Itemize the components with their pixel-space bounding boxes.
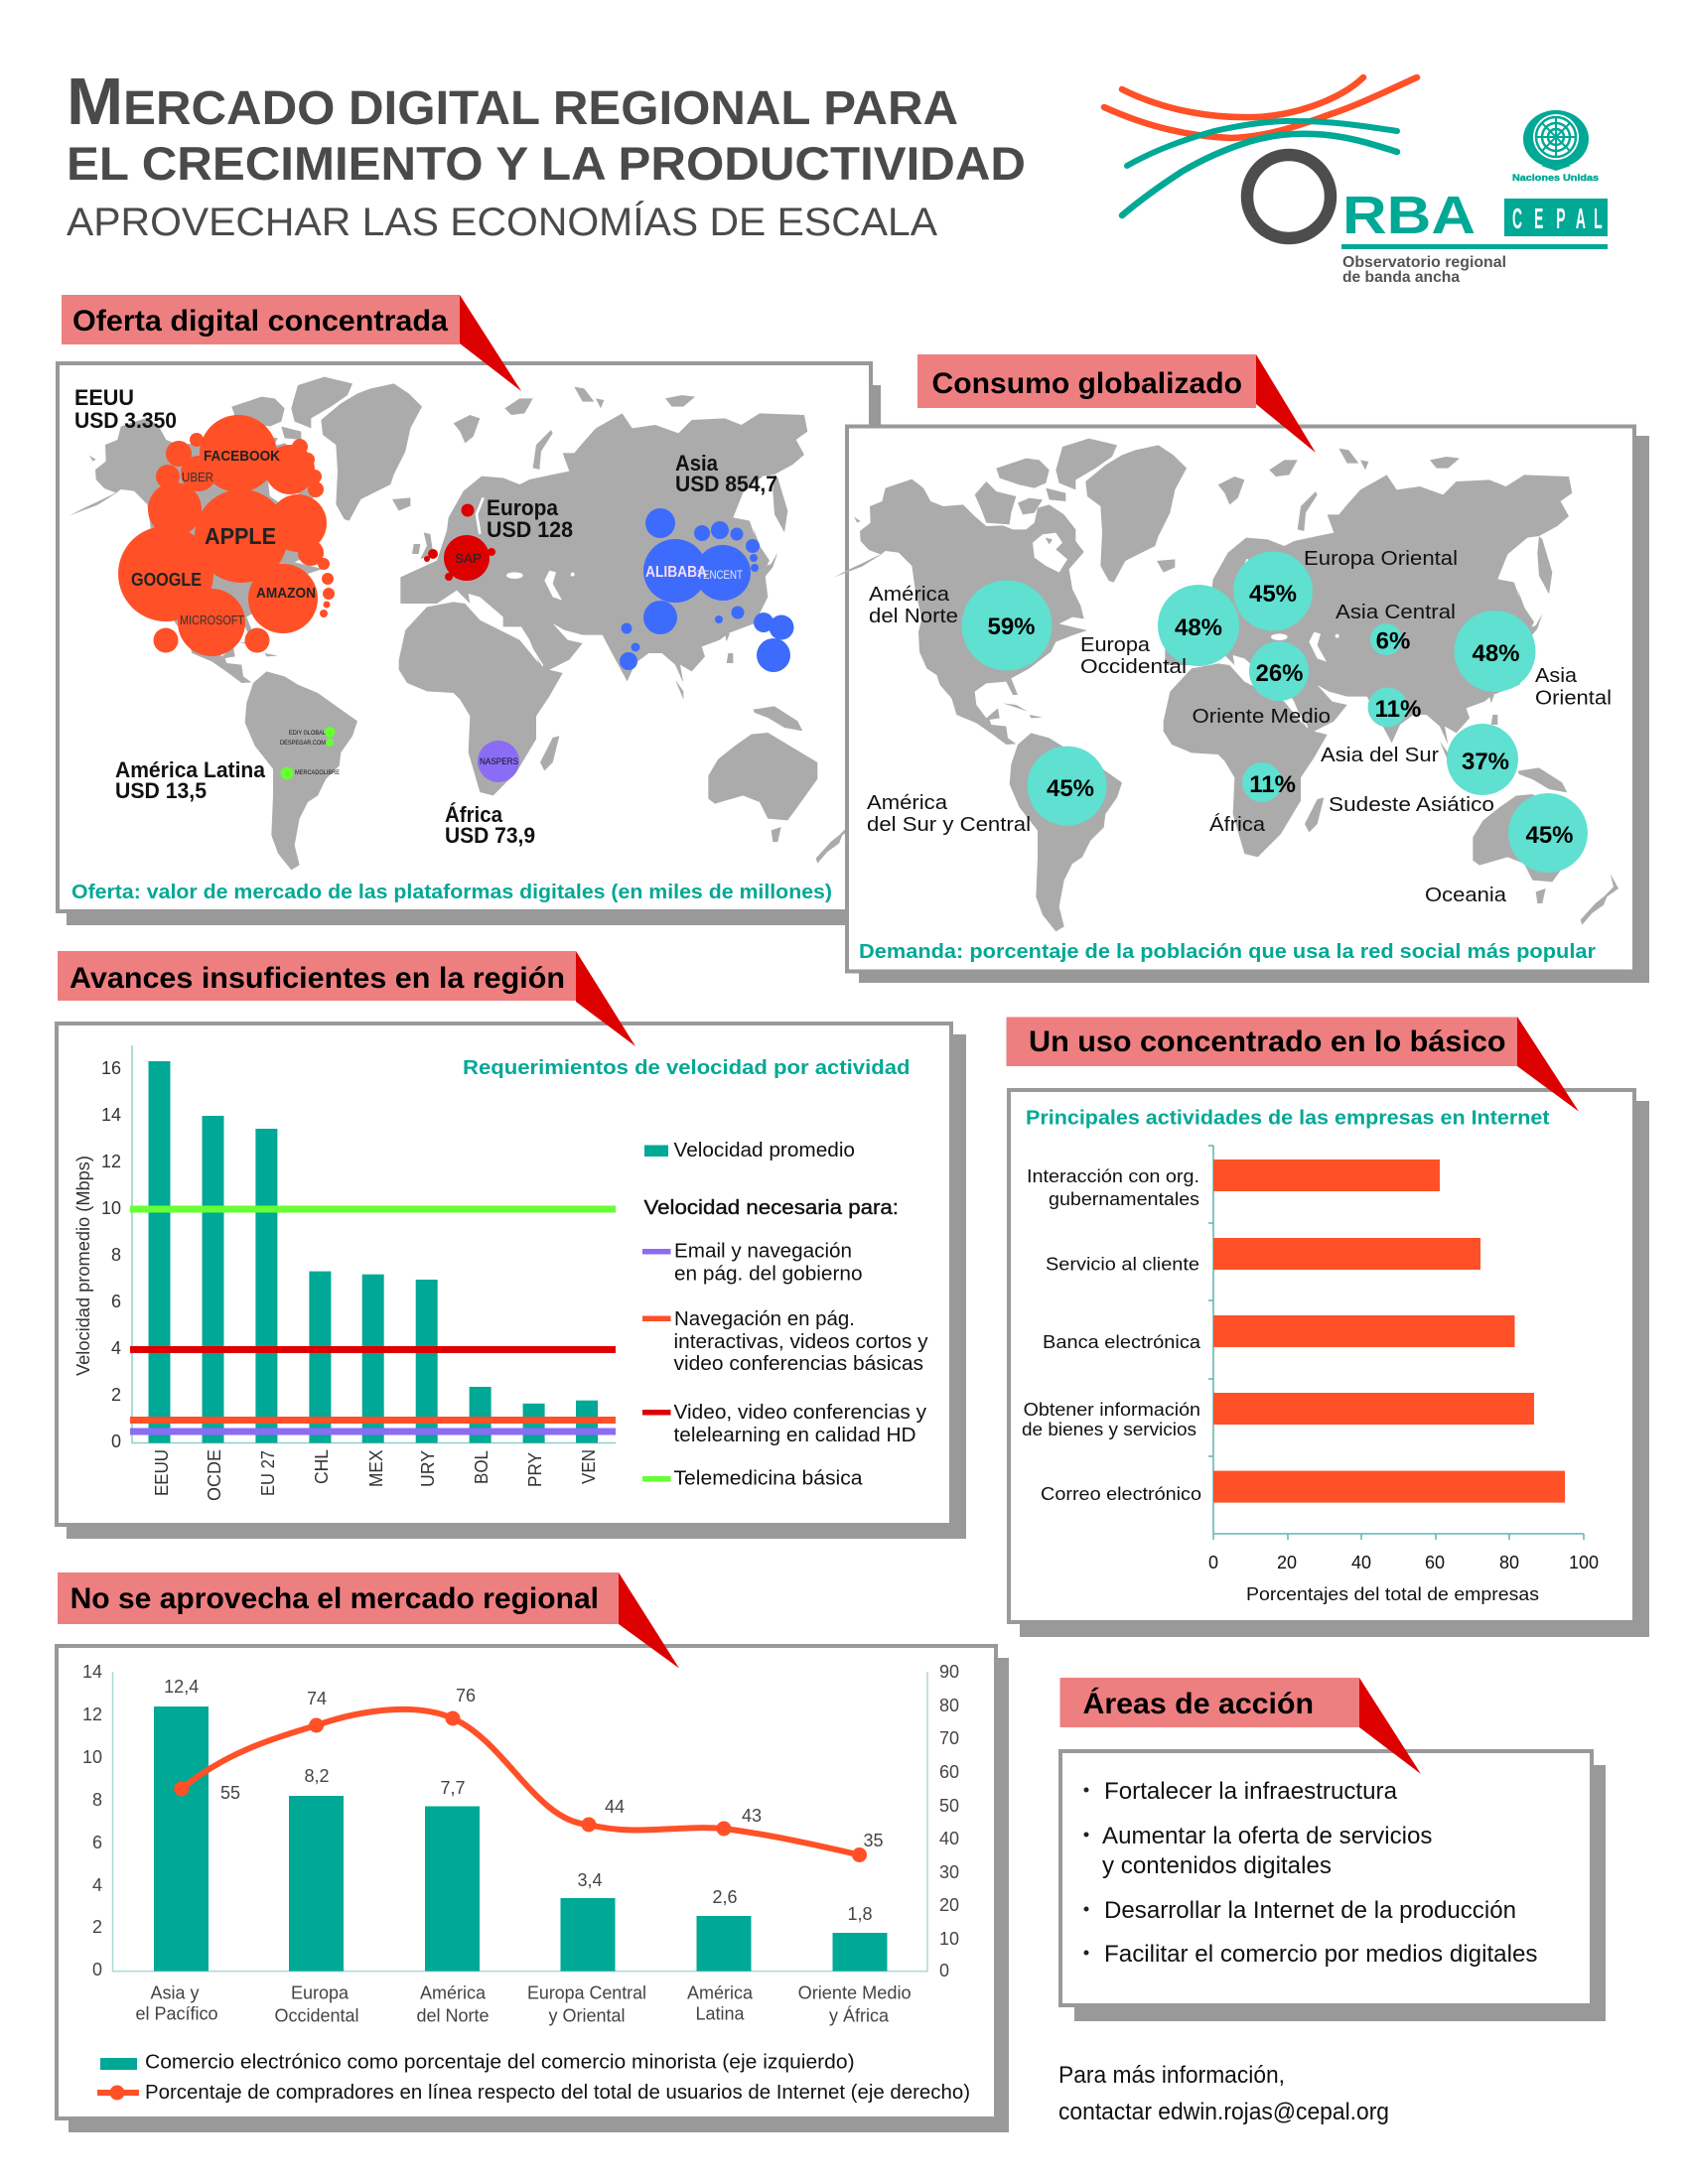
bar chart: velocidad promedio: OCDE (205, 1449, 224, 1501)
combo chart: comercio electronico: América (687, 1983, 754, 2003)
heading tab: avances: Avances insuficientes en la región (70, 962, 565, 995)
legend (97, 2051, 970, 2104)
bar chart: actividades: 100 (1569, 1553, 1599, 1572)
combo chart: comercio electronico: Occidental (274, 2005, 359, 2025)
combo chart: comercio electronico: 8 (92, 1790, 102, 1810)
company labels: APPLE (205, 523, 276, 549)
chart title: Principales actividades de las empresas en Internet (1026, 1108, 1550, 1130)
bar chart: actividades: 20 (1277, 1553, 1297, 1572)
title (67, 65, 1026, 244)
combo chart: comercio electronico: 0 (92, 1960, 102, 1979)
region labels: Asia Central (1336, 602, 1456, 623)
company labels: ALIBABA (645, 564, 707, 581)
heading tab: uso: Un uso concentrado en lo básico (1029, 1025, 1505, 1058)
region labels: África (1209, 813, 1266, 836)
region labels: USD 73,9 (445, 823, 535, 848)
combo chart: comercio electronico: 1,8 (847, 1904, 873, 1924)
combo chart: comercio electronico: 8,2 (304, 1766, 330, 1786)
heading tab: areas: Áreas de acción (1082, 1687, 1314, 1720)
legend: Velocidad necesaria para: (643, 1197, 899, 1219)
company labels: AMAZON (256, 585, 316, 602)
combo chart: comercio electronico: Latina (695, 2003, 746, 2023)
bubbles: Asia (620, 508, 794, 672)
legend: Porcentaje de compradores en línea respecto del total de usuarios de Internet (eje derecho) (145, 2082, 970, 2104)
region labels: EEUU (74, 385, 134, 410)
combo chart: comercio electronico: 20 (939, 1895, 959, 1915)
logo: Naciones Unidas: Naciones Unidas (1512, 173, 1599, 183)
region labels: América (867, 792, 948, 814)
chart title: Requerimientos de velocidad por actividad (463, 1057, 910, 1079)
bar chart: velocidad promedio: 4 (111, 1338, 121, 1358)
bar chart: velocidad promedio: PRY (525, 1452, 545, 1487)
percentage values: 6% (1376, 627, 1410, 655)
combo chart: comercio electronico: 2,6 (712, 1887, 738, 1907)
region labels: Oceania (1425, 885, 1507, 906)
contact text: contactar edwin.rojas@cepal.org (1058, 2099, 1389, 2125)
region labels: América (869, 584, 950, 606)
bar chart: velocidad promedio: EU 27 (258, 1450, 278, 1496)
combo chart: comercio electronico: 10 (939, 1929, 959, 1949)
legend: Email y navegación (674, 1240, 852, 1262)
legend: interactivas, videos cortos y (673, 1331, 927, 1353)
bar chart: actividades: Interacción con org. (1027, 1166, 1199, 1186)
bar chart: velocidad promedio: 2 (111, 1385, 121, 1405)
legend: Video, video conferencias y (673, 1402, 926, 1424)
bar chart: actividades: Banca electrónica (1043, 1332, 1201, 1352)
bubbles: Europa (424, 504, 495, 581)
logo: Naciones Unidas (1512, 110, 1599, 183)
bubble: Naspers (478, 741, 519, 782)
bar chart: actividades: de bienes y servicios (1022, 1420, 1196, 1439)
legend: Comercio electrónico como porcentaje del comercio minorista (eje izquierdo) (145, 2051, 855, 2073)
percentage values: 26% (1255, 660, 1304, 687)
percentage values: 48% (1472, 640, 1520, 667)
heading tab: consumo: Consumo globalizado (931, 367, 1242, 400)
heading tab: mercado (58, 1572, 679, 1668)
logo: ORBA: RBA (1342, 186, 1476, 245)
legend: Telemedicina básica (673, 1468, 863, 1490)
company labels: TENCENT (697, 568, 744, 582)
combo chart: comercio electronico: 14 (82, 1662, 102, 1682)
heading tab: avances (58, 951, 635, 1046)
legend: video conferencias básicas (673, 1353, 923, 1375)
bar chart: velocidad promedio: 14 (101, 1105, 121, 1125)
region labels: Oriental (1535, 687, 1612, 709)
logo: ORBA: de banda ancha (1342, 269, 1460, 286)
region labels: América Latina (115, 757, 266, 782)
bar chart: velocidad promedio: EEUU (152, 1449, 172, 1496)
bar chart: velocidad promedio: CHL (312, 1449, 332, 1484)
action list: Facilitar el comercio por medios digitales (1104, 1941, 1537, 1968)
combo chart: comercio electronico: 80 (939, 1696, 959, 1715)
region labels (867, 548, 1612, 906)
bubbles: Estados Unidos (118, 415, 335, 656)
combo chart: comercio electronico: 44 (605, 1797, 625, 1817)
heading tab: consumo (917, 354, 1316, 453)
combo chart: comercio electronico: y África (829, 2005, 890, 2025)
region labels: Sudeste Asiático (1329, 794, 1494, 816)
combo chart: comercio electronico: Europa (291, 1983, 350, 2003)
bar chart: actividades: gubernamentales (1049, 1189, 1199, 1209)
bar chart: velocidad promedio: BOL (472, 1450, 492, 1484)
action list: Aumentar la oferta de servicios (1102, 1823, 1432, 1849)
bubbles: porcentajes (961, 552, 1588, 873)
panel: oferta digital concentrada (58, 295, 881, 925)
combo chart: comercio electronico: del Norte (416, 2005, 490, 2025)
region labels: USD 13,5 (115, 778, 207, 803)
percentage values: 45% (1249, 581, 1297, 608)
caption: demanda: Demanda: porcentaje de la población que usa la red social más popular (859, 941, 1596, 963)
percentage values (987, 581, 1574, 849)
legend: Navegación en pág. (674, 1308, 855, 1330)
action list (1084, 1778, 1537, 1968)
bar chart: velocidad promedio: 8 (111, 1245, 121, 1265)
heading tab: areas (1060, 1678, 1421, 1774)
combo chart: comercio electronico: 7,7 (440, 1778, 466, 1798)
company labels: MERCADOLIBRE (295, 770, 340, 776)
region labels: Asia (1535, 665, 1578, 687)
heading tab: oferta: Oferta digital concentrada (72, 305, 448, 338)
combo chart: comercio electronico: 90 (939, 1662, 959, 1682)
bar chart: velocidad promedio: 16 (101, 1058, 121, 1078)
region labels (74, 385, 777, 848)
combo chart: comercio electronico (82, 1662, 959, 2025)
panel: mercado regional (57, 1572, 1009, 2132)
region labels: Europa Oriental (1304, 548, 1458, 570)
company labels: GOOGLE (131, 570, 202, 590)
bar chart: velocidad promedio: 0 (111, 1432, 121, 1451)
combo chart: comercio electronico: 2 (92, 1917, 102, 1937)
bar chart: velocidad promedio (73, 1045, 616, 1501)
contact text (1058, 2062, 1389, 2125)
region labels: USD 128 (487, 517, 573, 542)
percentage values: 59% (987, 614, 1036, 640)
combo chart: comercio electronico: 3,4 (577, 1870, 603, 1890)
combo chart: comercio electronico: 0 (939, 1961, 949, 1980)
bar chart: velocidad promedio: MEX (366, 1449, 386, 1487)
company labels: NASPERS (480, 756, 518, 766)
combo chart: comercio electronico: 4 (92, 1875, 102, 1895)
logo: ORBA (1104, 77, 1608, 286)
region labels: Europa (487, 495, 559, 520)
percentage values: 45% (1525, 822, 1574, 849)
region labels: Europa (1080, 634, 1151, 656)
bar chart: actividades: 60 (1425, 1553, 1445, 1572)
combo chart: comercio electronico: 6 (92, 1833, 102, 1852)
combo chart: comercio electronico: 40 (939, 1829, 959, 1848)
legend (642, 1140, 927, 1490)
combo chart: comercio electronico: 12,4 (164, 1677, 199, 1697)
company labels: SAP (455, 551, 482, 566)
panel: areas de accion (1060, 1678, 1606, 2021)
combo chart: comercio electronico: América (420, 1983, 487, 2003)
bar chart: actividades: Correo electrónico (1041, 1484, 1201, 1504)
region labels: Asia (675, 451, 719, 476)
combo chart: comercio electronico: 35 (863, 1831, 884, 1850)
bar chart: actividades: Porcentajes del total de empresas (1246, 1584, 1539, 1604)
panel: avances insuficientes (57, 951, 966, 1539)
bar chart: velocidad promedio: 12 (101, 1152, 121, 1171)
contact text: Para más información, (1058, 2062, 1285, 2089)
company labels: EDIY GLOBAL (289, 731, 327, 737)
combo chart: comercio electronico: 55 (220, 1783, 240, 1803)
combo chart: comercio electronico: 10 (82, 1747, 102, 1767)
combo chart: comercio electronico: el Pacífico (135, 2003, 218, 2023)
region labels: África (445, 802, 503, 827)
heading tab: uso (1007, 1017, 1579, 1112)
bubbles: América Latina (280, 727, 336, 780)
company labels: DESPEGAR.COM (280, 741, 326, 747)
bar chart: actividades: Servicio al cliente (1046, 1255, 1199, 1275)
action list: Fortalecer la infraestructura (1104, 1778, 1398, 1805)
percentage values: 45% (1047, 775, 1094, 802)
combo chart: comercio electronico: y Oriental (548, 2005, 626, 2025)
action list: Desarrollar la Internet de la producción (1104, 1897, 1516, 1924)
bar chart: velocidad promedio: 10 (101, 1198, 121, 1218)
region labels: USD 854,7 (675, 472, 777, 496)
action list: y contenidos digitales (1102, 1852, 1332, 1879)
region labels: Asia del Sur (1321, 745, 1439, 766)
combo chart: comercio electronico: 60 (939, 1762, 959, 1782)
region labels: USD 3.350 (74, 408, 177, 433)
combo chart: comercio electronico: 70 (939, 1728, 959, 1748)
bar chart: velocidad promedio: VEN (579, 1449, 599, 1484)
title: APROVECHAR LAS ECONOMÍAS DE ESCALA (67, 200, 937, 244)
company labels (131, 448, 744, 776)
bar chart: velocidad promedio: Velocidad promedio (Mbps) (73, 1156, 93, 1376)
combo chart: comercio electronico: 50 (939, 1796, 959, 1816)
combo chart: comercio electronico: 30 (939, 1862, 959, 1882)
bar chart: actividades: 0 (1208, 1553, 1218, 1572)
percentage values: 11% (1249, 771, 1296, 798)
combo chart: comercio electronico: 43 (742, 1806, 762, 1826)
region labels: del Sur y Central (867, 814, 1031, 836)
heading tab: mercado: No se aprovecha el mercado regional (70, 1582, 599, 1615)
heading tab: oferta (62, 295, 521, 391)
company labels: MICROSOFT (180, 613, 244, 627)
combo chart: comercio electronico: 76 (456, 1686, 476, 1706)
panel: uso concentrado (1007, 1017, 1649, 1637)
combo chart: comercio electronico: 74 (307, 1689, 327, 1708)
panel: consumo globalizado (834, 354, 1649, 983)
combo chart: comercio electronico: 12 (82, 1705, 102, 1724)
legend: telelearning en calidad HD (673, 1425, 915, 1446)
bar chart: actividades: 80 (1499, 1553, 1519, 1572)
region labels: Occidental (1080, 656, 1187, 678)
combo chart: comercio electronico: Oriente Medio (798, 1983, 912, 2003)
percentage values: 48% (1175, 614, 1222, 641)
logo: CEPAL: CEPAL (1512, 202, 1603, 234)
bar chart: actividades (1022, 1146, 1599, 1604)
title: EL CRECIMIENTO Y LA PRODUCTIVIDAD (67, 137, 1026, 190)
region labels: del Norte (869, 606, 958, 627)
bar chart: actividades: Obtener información (1024, 1400, 1200, 1420)
legend: Velocidad promedio (673, 1140, 855, 1161)
company labels: FACEBOOK (204, 448, 280, 465)
combo chart: comercio electronico: Europa Central (527, 1983, 646, 2003)
logo: ORBA: Observatorio regional (1342, 254, 1506, 271)
caption: oferta: Oferta: valor de mercado de las plataformas digitales (en miles de millones) (71, 882, 832, 903)
percentage values: 11% (1375, 696, 1421, 723)
bar chart: velocidad promedio: 6 (111, 1292, 121, 1311)
title: MERCADO DIGITAL REGIONAL PARA (67, 65, 958, 139)
combo chart: comercio electronico: Asia y (150, 1983, 200, 2003)
region labels: Oriente Medio (1192, 706, 1331, 728)
company labels: UBER (182, 470, 213, 484)
percentage values: 37% (1462, 749, 1509, 775)
legend: en pág. del gobierno (674, 1263, 862, 1285)
bar chart: actividades: 40 (1351, 1553, 1371, 1572)
bar chart: velocidad promedio: URY (418, 1450, 438, 1487)
